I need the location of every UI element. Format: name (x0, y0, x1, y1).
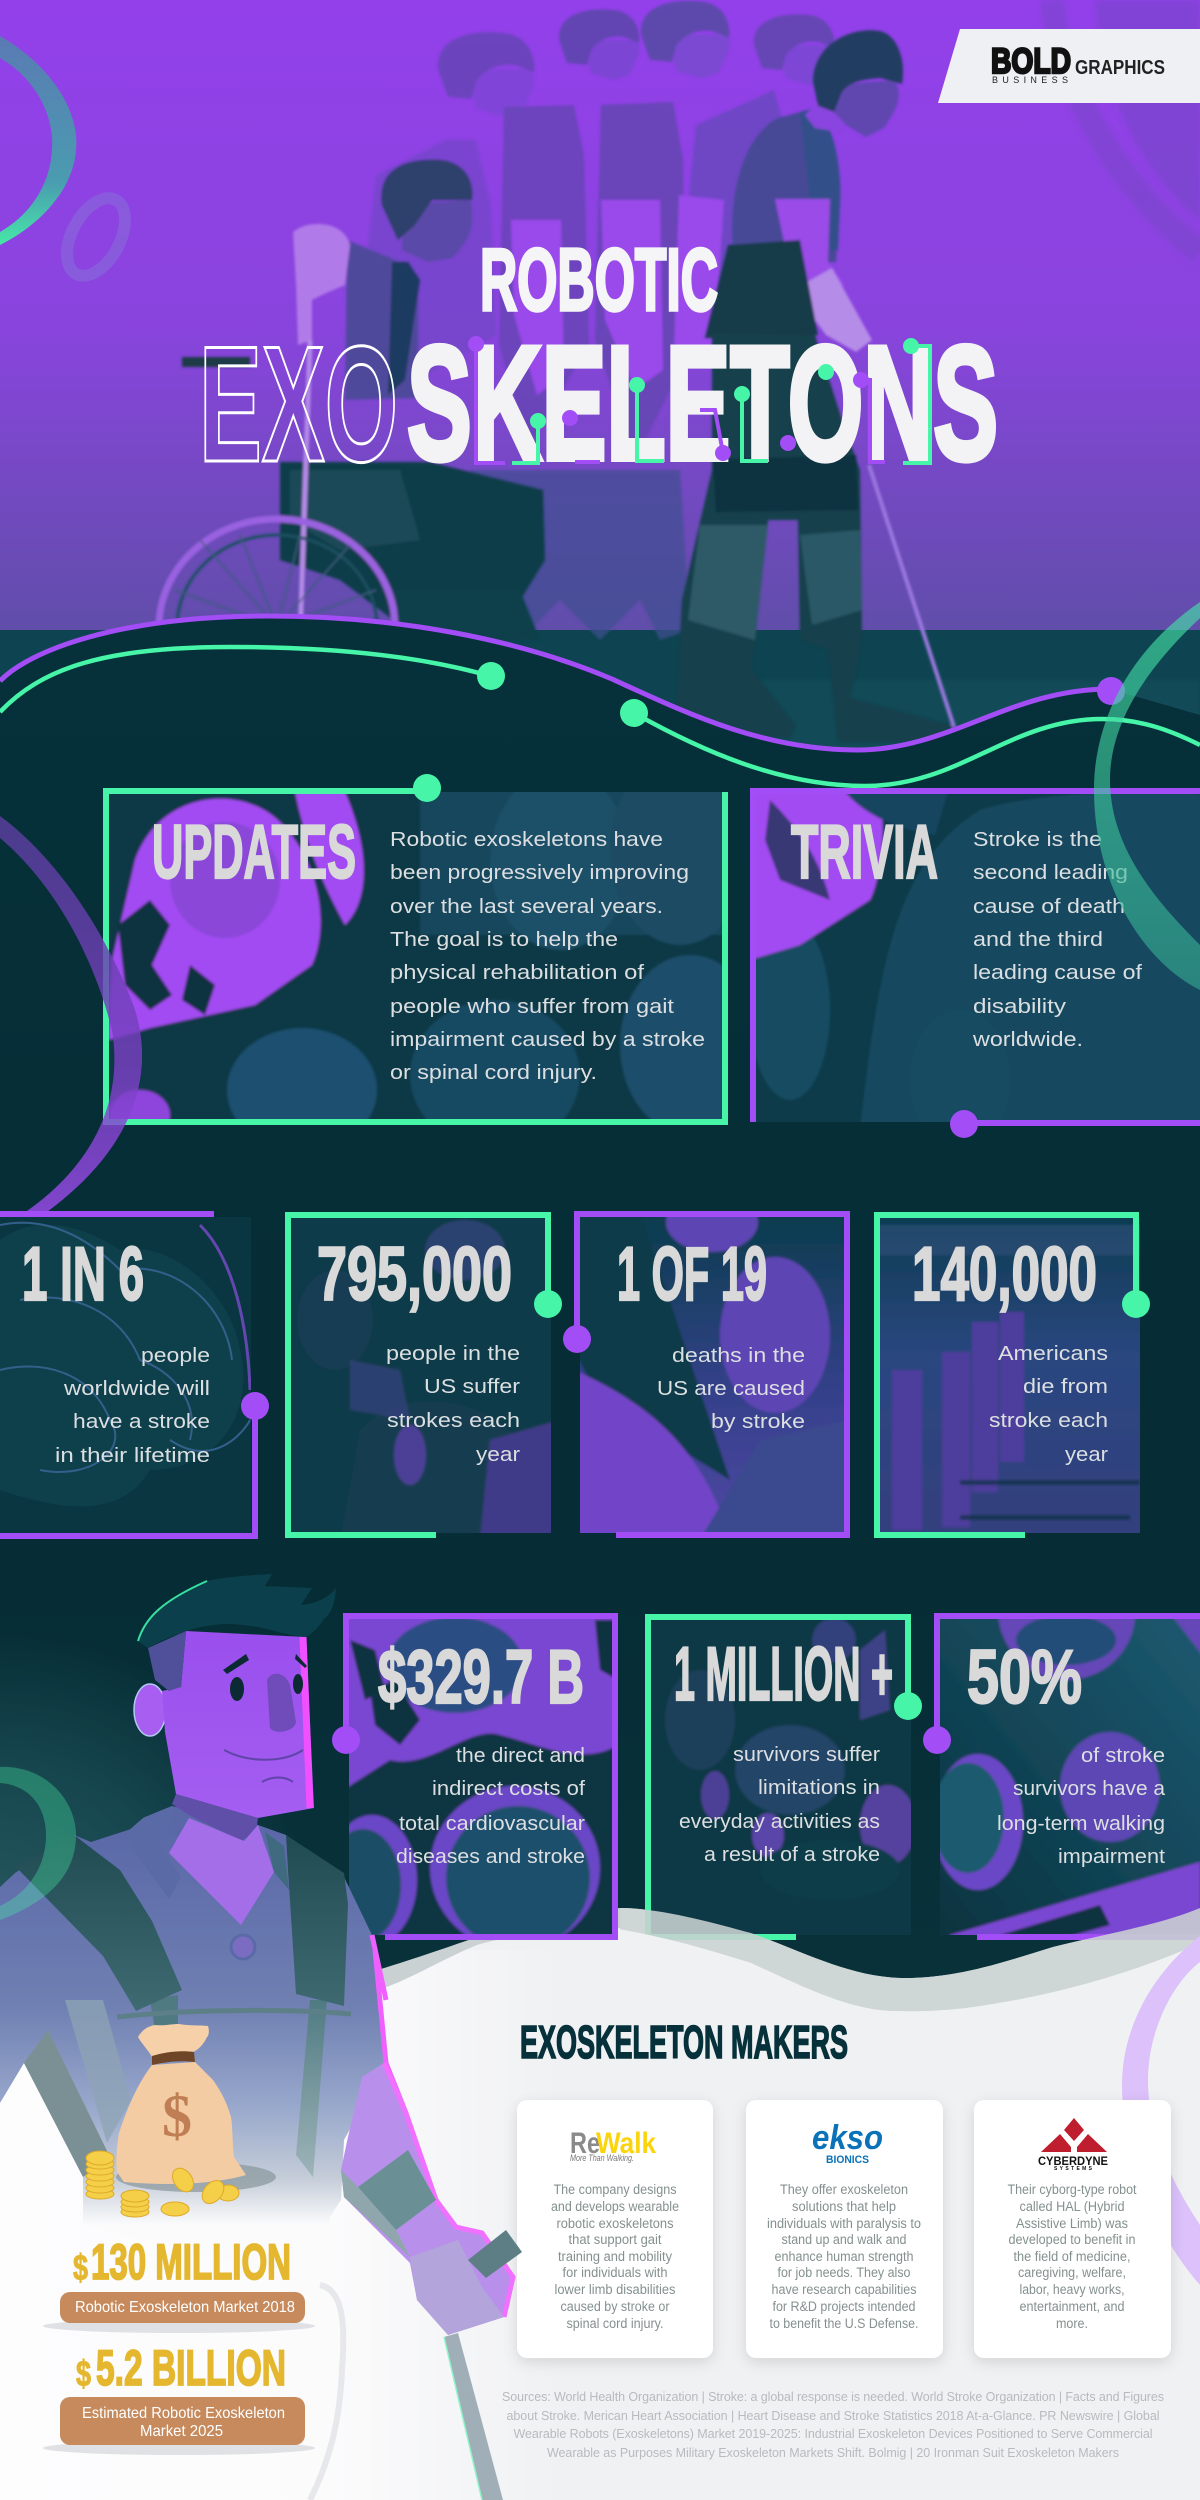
card border (937, 1616, 1200, 1937)
paragraph: Robotic exoskeletons have (390, 829, 663, 851)
figure: $329.7 B (378, 1635, 584, 1720)
description: to benefit the U.S Defense. (770, 2316, 918, 2331)
hand (410, 2240, 504, 2335)
logo: cyberdyne: SYSTEMS (1054, 2166, 1093, 2172)
caption: a result of a stroke (704, 1844, 880, 1866)
caption: limitations in (758, 1777, 880, 1799)
description: lower limb disabilities (554, 2282, 676, 2297)
market 2025: $ (76, 2353, 91, 2394)
money bag illustration (116, 2024, 276, 2192)
gold coins (86, 2151, 239, 2217)
logo: ekso bionics: ekso (812, 2119, 883, 2157)
face (162, 1631, 314, 1818)
description: spinal cord injury. (566, 2316, 664, 2331)
caption: stroke each (989, 1410, 1108, 1432)
figure: 795,000 (317, 1232, 512, 1317)
caption (989, 1343, 1108, 1466)
hip piece (310, 2285, 343, 2500)
caption: year (476, 1444, 520, 1466)
right arm (341, 2063, 513, 2335)
market 2025: 5.2 BILLION (96, 2340, 286, 2396)
description: the field of medicine, (1014, 2249, 1130, 2264)
description: Assistive Limb) was (1016, 2216, 1128, 2231)
caption (997, 1745, 1166, 1868)
logo: ekso bionics: BIONICS (826, 2154, 869, 2166)
description: have research capabilities (772, 2282, 917, 2297)
title: EXO (199, 312, 398, 496)
description: more. (1056, 2316, 1088, 2331)
panel: trivia (750, 785, 1200, 1150)
description: for individuals with (562, 2265, 668, 2280)
caption: of stroke (1081, 1745, 1165, 1767)
caption: people in the (386, 1343, 520, 1365)
body (0, 1806, 386, 2285)
paragraph: Stroke is the (973, 829, 1102, 851)
logo tag: Bold Business Graphics: BOLD (991, 42, 1071, 81)
figure: 1 IN 6 (22, 1232, 144, 1317)
ghost figures in stride sequence (356, 1, 834, 640)
description: training and mobility (558, 2249, 672, 2264)
arm bands (358, 2150, 436, 2230)
ground (0, 630, 1200, 770)
figure: 140,000 (912, 1232, 1097, 1317)
green ring over shoulder (0, 1767, 76, 1920)
caption: US suffer (424, 1376, 520, 1398)
caption: people (141, 1345, 210, 1367)
stat card: 1 of 19 (563, 1192, 850, 1539)
logo: ReWalk: Walk (596, 2127, 656, 2160)
left glow behind man (0, 1630, 330, 2060)
stat card: $329.7 B (325, 1613, 624, 1950)
caption: in their lifetime (55, 1445, 210, 1467)
lower wave gray band left (300, 1905, 620, 2012)
ring: left purple (0, 816, 142, 1242)
description: caused by stroke or (560, 2299, 670, 2314)
description: for R&D projects intended (772, 2299, 916, 2314)
paragraph: people who suffer from gait (390, 996, 675, 1018)
caption: have a stroke (73, 1411, 210, 1433)
card border (753, 791, 1200, 1122)
caption: total cardiovascular (399, 1813, 585, 1835)
caption: worldwide will (63, 1378, 210, 1400)
logo tag: Bold Business Graphics (938, 29, 1200, 103)
paragraph (972, 829, 1143, 1051)
card border (346, 1616, 615, 1937)
arm outer glow edge (384, 2063, 513, 2317)
nose (267, 1674, 296, 1732)
heading: TRIVIA (791, 810, 938, 895)
caption: long-term walking (997, 1813, 1165, 1835)
ear (134, 1684, 166, 1736)
stat card: 1 in 6 (0, 1214, 269, 1536)
title: ROBOTIC (480, 230, 718, 329)
stat card: 140,000 (875, 1212, 1150, 1539)
description: The company designs (554, 2182, 677, 2197)
paragraph: over the last several years. (390, 896, 663, 918)
caption: strokes each (387, 1410, 520, 1432)
stat card: 50% (923, 1613, 1200, 1942)
character: man in exoskeleton (0, 1574, 522, 2500)
caption: indirect costs of (432, 1778, 585, 1800)
maker card: Cyberdyne (974, 2100, 1171, 2358)
caption (386, 1343, 520, 1466)
logo: cyberdyne: CYBERDYNE (1038, 2154, 1108, 2168)
paragraph: disability (973, 996, 1066, 1018)
ring: right green (1094, 602, 1200, 990)
paragraph: cause of death (973, 896, 1125, 918)
market 2018 (43, 2234, 315, 2333)
maker card: ReWalk (517, 2100, 713, 2358)
caption: diseases and stroke (396, 1846, 585, 1868)
hair (138, 1574, 336, 1648)
face glow edge (303, 1637, 310, 1808)
description: caregiving, welfare, (1018, 2265, 1126, 2280)
ring: top left (0, 36, 76, 245)
title (199, 230, 998, 496)
logo tag: Bold Business Graphics: BUSINESS (992, 75, 1068, 85)
description: for job needs. They also (778, 2265, 910, 2280)
description: entertainment, and (1020, 2299, 1124, 2314)
paragraph: worldwide. (972, 1029, 1083, 1051)
market 2018: $ (73, 2247, 88, 2288)
card border (648, 1617, 908, 1937)
logo: cyberdyne (1038, 2118, 1108, 2172)
paragraph: The goal is to help the (390, 929, 618, 951)
paragraph: or spinal cord injury. (390, 1062, 597, 1084)
wheelchair user (159, 160, 545, 735)
description: labor, heavy works, (1020, 2282, 1124, 2297)
upper straps (15, 1835, 182, 2011)
caption: everyday activities as (679, 1811, 880, 1833)
hair glow (138, 1581, 207, 1641)
caption: by stroke (711, 1411, 805, 1433)
logo: ReWalk: Re (570, 2127, 600, 2160)
paragraph: and the third (973, 929, 1103, 951)
description: and develops wearable (551, 2199, 679, 2214)
caption: die from (1023, 1376, 1108, 1398)
caption (396, 1745, 585, 1868)
crutch pole (444, 2333, 503, 2500)
market 2018: 130 MILLION (91, 2234, 291, 2290)
logo: ReWalk (570, 2127, 656, 2163)
logo: ReWalk: More Than Walking. (570, 2153, 634, 2163)
caption (657, 1345, 805, 1433)
heading: exoskeleton makers: EXOSKELETON MAKERS (520, 2016, 848, 2068)
description: individuals with paralysis to (767, 2216, 921, 2231)
figure: 50% (967, 1635, 1082, 1720)
caption: year (1065, 1444, 1108, 1466)
dark section fill (0, 616, 1200, 2060)
heading: UPDATES (152, 810, 356, 895)
description: Their cyborg-type robot (1008, 2182, 1137, 2197)
paragraph: leading cause of (973, 962, 1143, 984)
stat card: 1 million +: 1 MILLION + (674, 1632, 893, 1717)
sources: Sources: World Health Organization | Stroke: a global response is needed. World Stroke Organization | Facts and Figures (502, 2390, 1164, 2404)
stat card: 795,000 (285, 1212, 562, 1540)
caption: survivors have a (1013, 1778, 1166, 1800)
ghost legs (470, 470, 690, 640)
hero photo: patients walking with exoskeleton (0, 0, 1200, 770)
paragraph: physical rehabilitation of (390, 962, 645, 984)
logo tag: Bold Business Graphics: GRAPHICS (1075, 57, 1165, 79)
sources (502, 2390, 1164, 2460)
paragraph: second leading (973, 862, 1128, 884)
wave overlay over card bottoms (600, 1908, 1200, 2040)
caption: survivors suffer (733, 1744, 880, 1766)
card border (0, 1214, 255, 1536)
card border (106, 791, 725, 1122)
crutch handle (468, 2230, 522, 2278)
neck shade (172, 1794, 258, 1841)
caption (55, 1345, 210, 1467)
sideburn shade (148, 1631, 186, 1691)
description (1008, 2182, 1137, 2331)
collars (127, 1806, 181, 1899)
card border (577, 1214, 847, 1535)
description: robotic exoskeletons (556, 2216, 674, 2231)
description (767, 2182, 921, 2331)
caption: deaths in the (672, 1345, 805, 1367)
figure: 1 OF 19 (617, 1232, 767, 1317)
description: developed to benefit in (1008, 2232, 1136, 2247)
maker card: Ekso Bionics (746, 2100, 943, 2358)
mouth (224, 1750, 303, 1782)
sources: about Stroke. Merican Heart Association | Heart Disease and Stroke Statistics 2018 At-a-Glance. PR Newswire | Global (506, 2409, 1160, 2423)
eyes and brows (223, 1654, 307, 1701)
caption: impairment (1058, 1846, 1165, 1868)
sources: Wearable Robots (Exoskeletons) Market 2019-2025: Industrial Exoskeleton Devices Positioned to Serve Commercial (514, 2427, 1152, 2441)
panel: updates (103, 774, 728, 1125)
wave lines with dots (0, 616, 1200, 786)
sources: Wearable as Purposes Military Exoskeleton Markets Shift. Bolmig | 20 Ironman Suit Exoskeleton Makers (547, 2446, 1119, 2460)
description: called HAL (Hybrid (1020, 2199, 1124, 2214)
description: stand up and walk and (782, 2232, 906, 2247)
white glow lower left (0, 1950, 560, 2500)
lower straps (65, 2000, 131, 2143)
description: that support gait (568, 2232, 662, 2247)
card border (288, 1215, 548, 1535)
caption: the direct and (456, 1745, 585, 1767)
description: They offer exoskeleton (780, 2182, 908, 2197)
caption (679, 1744, 880, 1866)
caption: Americans (998, 1343, 1108, 1365)
caption: US are caused (657, 1378, 805, 1400)
V neck (169, 1818, 274, 1925)
description (551, 2182, 679, 2331)
card border (877, 1215, 1136, 1535)
ring: right lavender (1122, 1936, 1200, 2285)
ring: small bubble (55, 189, 137, 285)
description: enhance human strength (774, 2249, 914, 2264)
paragraph (390, 829, 705, 1084)
market 2025 (43, 2340, 315, 2455)
stat card: 1 million + (645, 1614, 922, 1941)
main figure wearing exoskeleton (675, 30, 962, 742)
shirt button (231, 1935, 255, 1959)
money bag illustration: $ (162, 2083, 192, 2149)
description: solutions that help (792, 2199, 896, 2214)
market 2025: Market 2025 (140, 2423, 223, 2440)
market 2018: Robotic Exoskeleton Market 2018 (75, 2299, 295, 2316)
market 2025: Estimated Robotic Exoskeleton (82, 2405, 285, 2422)
paragraph: been progressively improving (390, 862, 689, 884)
paragraph: impairment caused by a stroke (390, 1029, 705, 1051)
